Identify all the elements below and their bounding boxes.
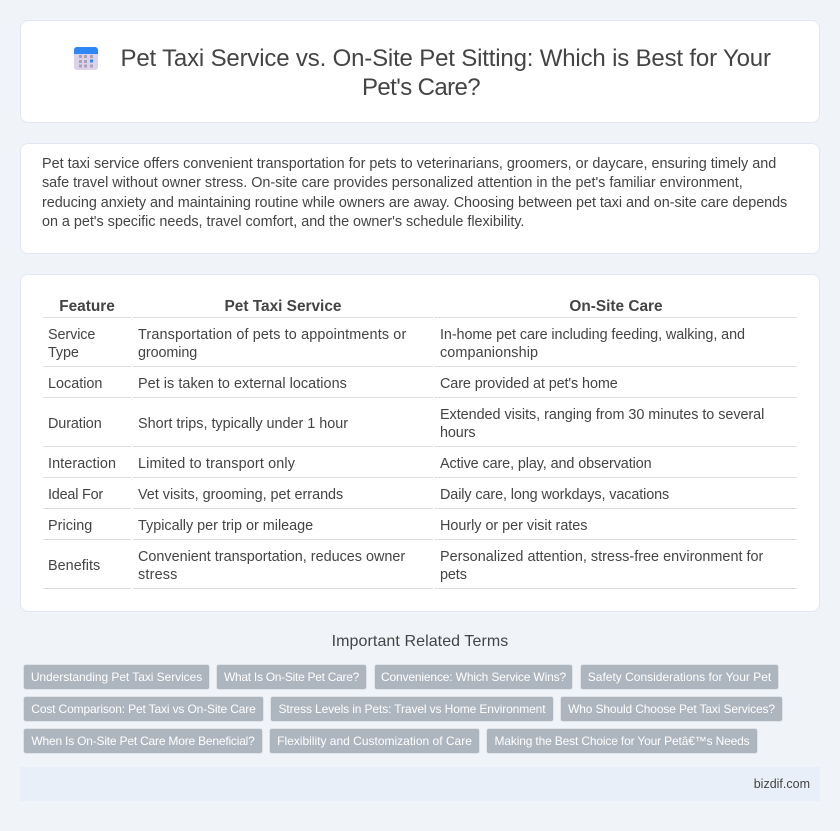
tag [270,696,554,722]
title [120,45,771,101]
row: pricing: Hourly or per visit rates [440,518,587,534]
row: location [43,376,797,398]
table header: On-Site Care [569,298,663,315]
row: benefits: Personalized attention, stress-free environment for [440,549,763,565]
tag: Convenience: Which Service Wins? [381,670,566,684]
tag [374,664,573,690]
row: interaction: Active care, play, and observation [440,456,652,472]
footer brand: bizdif.com [754,777,810,791]
tag [486,728,758,754]
row: ideal for: Vet visits, grooming, pet errands [138,487,343,503]
tag: Safety Considerations for Your Pet [588,670,771,684]
row: location: Care provided at pet's home [440,376,618,392]
comparison table panel [20,274,820,612]
row: service type [43,327,797,367]
related terms heading: Important Related Terms [332,633,508,650]
row: pricing [43,518,797,540]
row: benefits: Convenient transportation, reduces owner [138,549,405,565]
intro text: Pet taxi service offers convenient transportation for pets to veterinarians, groomers, or daycare, ensuring timely and [42,156,776,172]
tag: Stress Levels in Pets: Travel vs Home Environment [279,702,545,716]
tag [23,728,263,754]
tag: Flexibility and Customization of Care [277,734,472,748]
tag [216,664,367,690]
row: pricing: Typically per trip or mileage [138,518,313,534]
row: location: Location [48,376,102,392]
tag: What Is On-Site Pet Care? [224,670,359,684]
row: interaction: Limited to transport only [138,456,295,472]
tag [560,696,783,722]
tag [580,664,779,690]
icon: calendar [74,47,98,70]
row: benefits: Benefits [48,558,100,574]
title: Pet Taxi Service vs. On-Site Pet Sitting: Which is Best for Your [120,45,771,72]
row: benefits: stress [138,567,178,583]
comparison table [43,298,797,589]
tag: When Is On-Site Pet Care More Beneficial? [31,734,255,748]
row: duration: hours [440,425,476,441]
row: interaction: Interaction [48,456,116,472]
footer [20,767,820,801]
row: duration: Short trips, typically under 1 hour [138,416,348,432]
intro panel [20,143,820,254]
tag: Making the Best Choice for Your Petâ€™s Needs [495,734,749,748]
related terms tags [23,664,783,754]
table header [43,298,797,318]
row: duration: Extended visits, ranging from 30 minutes to several [440,407,764,423]
row: service type: companionship [440,345,538,361]
row: ideal for: Ideal For [48,487,103,503]
table header: Feature [59,298,115,315]
tag: Understanding Pet Taxi Services [31,670,202,684]
row: service type: In-home pet care including feeding, walking, and [440,327,745,343]
row: duration: Duration [48,416,102,432]
tag [269,728,480,754]
row: location: Pet is taken to external locations [138,376,347,392]
row: service type: Service [48,327,95,343]
intro text: on a pet's specific needs, travel comfort, and the owner's schedule flexibility. [42,214,524,230]
intro text [42,156,787,230]
row: benefits: pets [440,567,467,583]
tag [23,696,264,722]
tag: Cost Comparison: Pet Taxi vs On-Site Care [31,702,256,716]
row: pricing: Pricing [48,518,92,534]
row: service type: grooming [138,345,197,361]
row: ideal for [43,487,797,509]
tag: Who Should Choose Pet Taxi Services? [568,702,775,716]
intro text: safe travel without owner stress. On-site care provides personalized attention in the pet's familiar environment, [42,175,743,191]
row: benefits [43,549,797,589]
row: ideal for: Daily care, long workdays, vacations [440,487,669,503]
intro text: reducing anxiety and maintaining routine while owners are away. Choosing between pet taxi and on-site care depends [42,195,787,211]
table header: Pet Taxi Service [225,298,341,315]
row: duration [43,407,797,447]
title: Pet's Care? [362,74,480,101]
row: service type: Transportation of pets to appointments or [138,327,406,343]
tag [23,664,210,690]
header panel [20,20,820,123]
row: service type: Type [48,345,79,361]
row: interaction [43,456,797,478]
